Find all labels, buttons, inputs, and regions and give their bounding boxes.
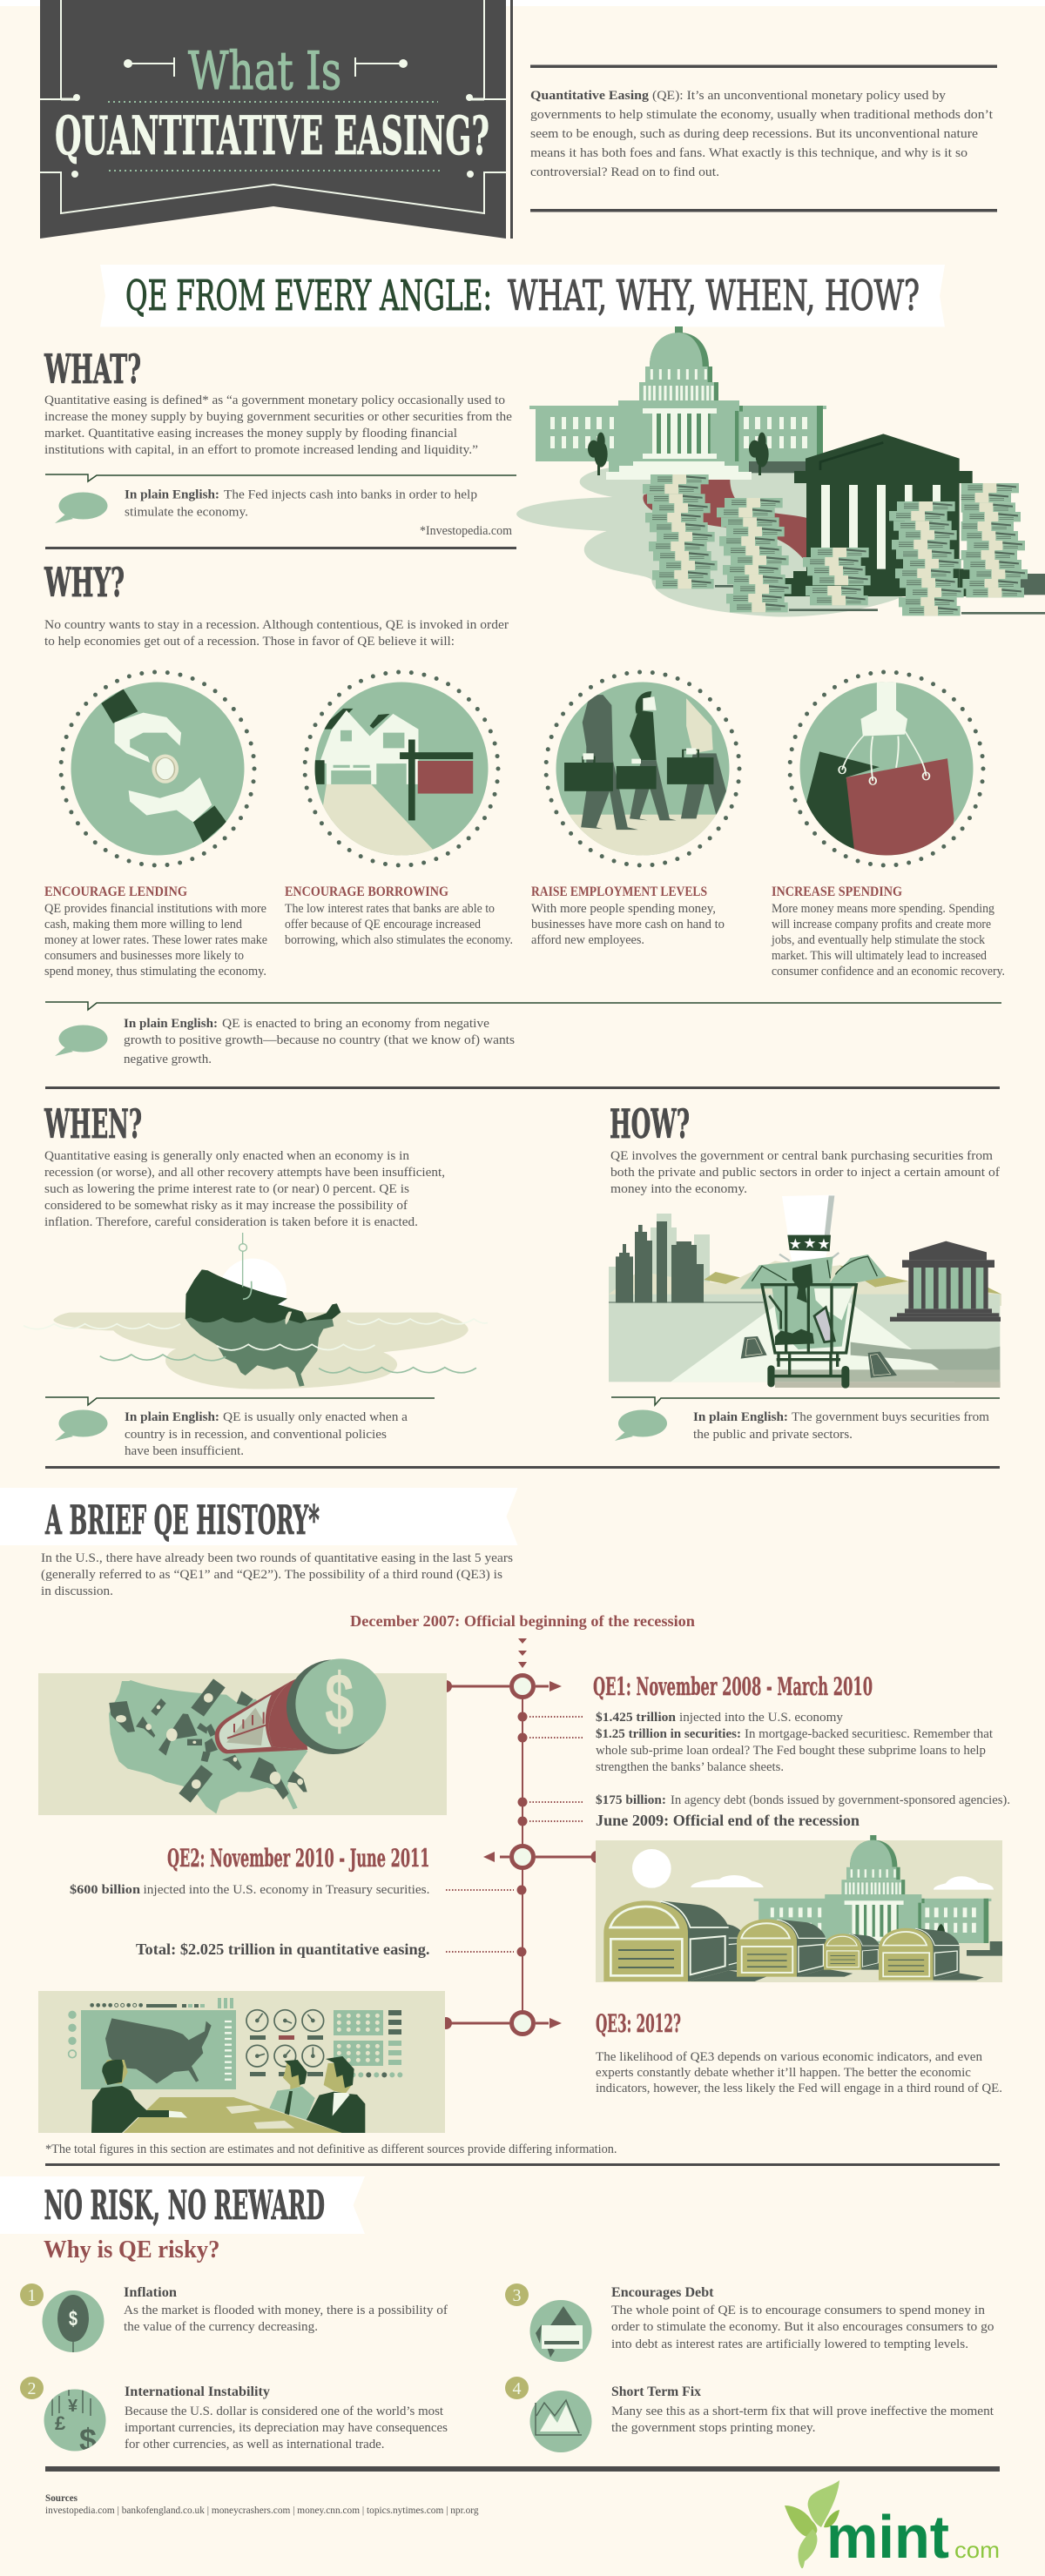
- callout: plain English why: growth to positive growth—because no country (that we know of) wants: [124, 1033, 515, 1047]
- QE1 text block: injected into the U.S. economy: [679, 1711, 844, 1725]
- cart: [762, 1285, 856, 1376]
- section: What: [44, 346, 516, 549]
- section: When: recession (or worse), and all other recovery attempts have been insufficient,: [44, 1166, 445, 1180]
- QE3 text block: The likelihood of QE3 depends on various economic indicators, and even: [596, 2050, 982, 2064]
- risk 4: short term fix: [505, 2377, 994, 2452]
- risk 3: encourages debt: The whole point of QE is to encourage consumers to spend money in: [611, 2304, 986, 2317]
- icon: house for sale: [305, 672, 498, 867]
- column: increase spending: consumer confidence and an economic recovery.: [772, 965, 1005, 979]
- risk 1: inflation: $: [69, 2307, 78, 2331]
- column: increase spending: will increase company profits and create more: [772, 918, 991, 932]
- column: raise employment: afford new employees.: [531, 933, 644, 947]
- illustration: capitol, bank and money stacks: [516, 326, 1045, 616]
- logo: mint.com: com: [954, 2537, 1000, 2563]
- QE3 text block: experts constantly debate whether it’ll happen. The better the economic: [596, 2066, 971, 2080]
- illustration: megaphone over US map: $: [325, 1658, 354, 1745]
- section: What: *Investopedia.com: [420, 524, 512, 538]
- column: increase spending: INCREASE SPENDING: [772, 884, 902, 899]
- hat: [782, 1195, 834, 1236]
- falling securities: [741, 1336, 897, 1378]
- column: encourage lending: QE provides financial institutions with more: [44, 902, 266, 916]
- callout: plain English why: negative growth.: [124, 1053, 212, 1066]
- risk 2: international instability: Because the U.S. dollar is considered one of the world’s most: [125, 2404, 444, 2418]
- risk 1: inflation: As the market is flooded with money, there is a possibility of: [124, 2304, 448, 2317]
- callout: plain English when: have been insufficient.: [125, 1444, 244, 1458]
- section: How: HOW?: [610, 1100, 690, 1147]
- section: No risk, no reward: [0, 2176, 994, 2458]
- QE1 text block: In agency debt (bonds issued by government-sponsored agencies).: [671, 1793, 1010, 1807]
- column: encourage borrowing: [285, 884, 513, 947]
- callout: plain English why: In plain English:: [124, 1017, 218, 1031]
- intro text block: (QE): It’s an unconventional monetary policy used by: [652, 89, 947, 103]
- callout: plain English how: In plain English:: [693, 1410, 788, 1424]
- section: What: Quantitative easing is defined* as “a government monetary policy occasionally used to: [44, 393, 505, 407]
- banner heading: QE from every angle: [100, 265, 945, 327]
- illustration: Uncle Sam with shopping cart: ★: [818, 1236, 830, 1253]
- column: increase spending: [771, 884, 1005, 979]
- subheading: Why is QE risky?: [44, 2236, 219, 2263]
- timeline start: [350, 1612, 695, 1668]
- risk 1: inflation: Inflation: [124, 2285, 177, 2300]
- risk 2: international instability: International Instability: [125, 2384, 270, 2399]
- QE1 text block: $1.25 trillion in securities:: [596, 1727, 741, 1741]
- column: encourage lending: cash, making them more willing to lend: [44, 918, 242, 932]
- heading banner: [0, 2176, 365, 2234]
- logo: mint.com: mint: [826, 2503, 949, 2571]
- illustration: Uncle Sam with shopping cart: ★: [789, 1236, 802, 1253]
- risk 4: short term fix: Many see this as a short-term fix that will prove ineffective the moment: [611, 2404, 994, 2418]
- history intro: [41, 1551, 513, 1598]
- callout: plain English: [45, 474, 516, 523]
- section: What: increase the money supply by buying government securities or other securities from the: [44, 410, 512, 424]
- heading banner: NO RISK, NO REWARD: [44, 2182, 325, 2229]
- QE3 text block: [596, 2009, 1002, 2095]
- column: encourage lending: ENCOURAGE LENDING: [44, 884, 187, 899]
- capitol building: [529, 326, 826, 480]
- callout: plain English when: QE is usually only enacted when a: [223, 1410, 408, 1424]
- section: How: money into the economy.: [610, 1182, 747, 1196]
- timeline start: December 2007: Official beginning of the recession: [350, 1612, 695, 1630]
- section: When: Quantitative easing is generally only enacted when an economy is in: [44, 1149, 410, 1163]
- callout: plain English: In plain English:: [125, 488, 219, 501]
- section: How: QE involves the government or central bank purchasing securities from: [610, 1149, 993, 1163]
- risk 3: encourages debt: 3: [512, 2286, 521, 2305]
- risk 3: encourages debt: order to stimulate the economy. But it also encourages consumers to go: [611, 2320, 994, 2334]
- callout: plain English when: country is in recession, and conventional policies: [125, 1428, 387, 1442]
- risk 4: short term fix: 4: [512, 2379, 521, 2398]
- logo: mint.com: [785, 2480, 1000, 2571]
- sources: investopedia.com | bankofengland.co.uk | moneycrashers.com | money.cnn.com | topics.nytimes.com | npr.org: [45, 2504, 479, 2516]
- history intro: In the U.S., there have already been two rounds of quantitative easing in the last 5 years: [41, 1551, 513, 1565]
- risk 1: inflation: 1: [28, 2286, 37, 2305]
- risk 2: international instability: £: [55, 2412, 66, 2434]
- callout: plain English: The Fed injects cash into banks in order to help: [224, 488, 477, 501]
- risk 2: international instability: ¥: [68, 2397, 78, 2416]
- banner heading: QE from every angle: QE FROM EVERY ANGLE:: [125, 272, 492, 320]
- section: Why: WHY?: [44, 559, 125, 606]
- timeline axis and nodes: [440, 1675, 603, 2034]
- intro text block: controversial? Read on to find out.: [530, 165, 719, 179]
- illustration: hooked US map in water: [24, 1233, 488, 1389]
- column: increase spending: More money means more spending. Spending: [772, 902, 994, 916]
- risk 2: international instability: for other currencies, as well as international trade.: [125, 2438, 385, 2452]
- section: When: inflation. Therefore, careful consideration is taken before it is enacted.: [44, 1215, 418, 1229]
- column: increase spending: jobs, and eventually help stimulate the stock: [771, 933, 985, 947]
- QE1 text block: [593, 1672, 1010, 1829]
- title: Quantitative Easing: QUANTITATIVE EASING?: [55, 105, 489, 167]
- illustration: capitol and treasury chests: [596, 1835, 1002, 1982]
- column: encourage lending: spend money, thus stimulating the economy.: [44, 965, 266, 979]
- callout: plain English when: [45, 1397, 435, 1458]
- intro text block: means it has both foes and fans. What exactly is this technique, and why is it so: [530, 146, 967, 160]
- icon: shopping bags: [786, 672, 983, 867]
- column: encourage borrowing: offer because of QE encourage increased: [285, 918, 481, 932]
- section: How: [609, 1100, 1001, 1442]
- QE3 text block: QE3: 2012?: [596, 2009, 681, 2038]
- risk 2: international instability: $: [79, 2422, 97, 2458]
- section: What: institutions with capital, in an effort to promote increased lending and liquidity.”: [44, 443, 478, 457]
- column: increase spending: market. This will ultimately lead to increased: [772, 949, 987, 963]
- risk 1: inflation: the value of the currency decreasing.: [124, 2320, 318, 2334]
- sources: Sources: [45, 2492, 78, 2504]
- QE2 text block: injected into the U.S. economy in Treasury securities.: [143, 1883, 429, 1897]
- column: encourage borrowing: The low interest rates that banks are able to: [285, 902, 495, 916]
- column: encourage borrowing: borrowing, which also stimulates the economy.: [285, 933, 513, 947]
- QE1 text block: $175 billion:: [596, 1793, 666, 1807]
- risk 3: encourages debt: Encourages Debt: [611, 2285, 714, 2300]
- history intro: (generally referred to as “QE1” and “QE2”). The possibility of a third round (QE3) is: [41, 1568, 502, 1582]
- icon: lending hands: [61, 672, 254, 865]
- risk 3: encourages debt: [505, 2283, 994, 2362]
- risk 2: international instability: 2: [28, 2379, 37, 2398]
- section: Why: to help economies get out of a recession. Those in favor of QE believe it will:: [44, 635, 455, 649]
- section: When: considered to be somewhat risky as it may increase the possibility of: [44, 1199, 408, 1213]
- callout: plain English why: QE is enacted to bring an economy from negative: [222, 1017, 489, 1031]
- section: How: both the private and public sectors in order to inject a certain amount of: [610, 1166, 1000, 1180]
- history intro: in discussion.: [41, 1584, 113, 1598]
- risk 3: encourages debt: into debt as interest rates are artificially lowered to tempting levels.: [611, 2337, 968, 2351]
- section: Brief QE history: [0, 1488, 1010, 2156]
- figure in cart: [740, 1254, 887, 1349]
- illustration: control room meeting: [38, 1991, 445, 2133]
- icon: workers with briefcases: [546, 672, 739, 865]
- QE1 text block: In mortgage-backed securitiesc. Remember that: [745, 1727, 994, 1741]
- column: encourage lending: consumers and businesses more likely to: [44, 949, 244, 963]
- illustration: Uncle Sam with shopping cart: ★: [804, 1234, 816, 1251]
- risk 4: short term fix: the government stops printing money.: [611, 2421, 815, 2435]
- trees: [588, 433, 769, 475]
- column: raise employment: With more people spending money,: [531, 902, 716, 916]
- intro text block: Quantitative Easing: [530, 89, 650, 103]
- gauges: [246, 2010, 324, 2067]
- section: What: market. Quantitative easing increases the money supply by flooding financial: [44, 427, 457, 441]
- title banner: [40, 0, 513, 239]
- column: encourage borrowing: ENCOURAGE BORROWING: [285, 884, 448, 899]
- footnote: *The total figures in this section are estimates and not definitive as different sources provide differing information.: [45, 2142, 617, 2156]
- intro text block: governments to help stimulate the economy, usually when traditional methods don’t: [530, 108, 994, 122]
- illustration: megaphone over US map: [38, 1658, 447, 1815]
- callout: plain English: stimulate the economy.: [125, 505, 248, 519]
- callout: plain English how: the public and private sectors.: [693, 1428, 853, 1442]
- section: Why: No country wants to stay in a recession. Although contentious, QE is invoked in order: [44, 618, 509, 632]
- QE1 text block: whole sub-prime loan ordeal? The Fed bought these subprime loans to help: [596, 1744, 986, 1758]
- intro text block: [530, 64, 997, 212]
- callout: plain English why: [45, 1002, 1001, 1066]
- QE1 text block: strengthen the banks’ balance sheets.: [596, 1760, 784, 1774]
- QE3 text block: indicators, however, the less likely the Fed will engage in a third round of QE.: [596, 2082, 1002, 2095]
- column: raise employment: RAISE EMPLOYMENT LEVELS: [531, 884, 707, 899]
- callout: plain English when: In plain English:: [125, 1410, 219, 1424]
- illustration: Uncle Sam with shopping cart: [609, 1195, 1001, 1389]
- central bank: [784, 434, 1045, 596]
- table and people: [124, 2097, 342, 2133]
- column: raise employment: businesses have more cash on hand to: [531, 918, 725, 932]
- callout: plain English how: The government buys securities from: [792, 1410, 989, 1424]
- callout: plain English how: [611, 1397, 1000, 1442]
- money stacks: [643, 474, 1028, 615]
- column: encourage lending: [44, 884, 267, 979]
- heading banner: [0, 1488, 517, 1545]
- column: raise employment: [531, 884, 725, 947]
- risk 2: international instability: [20, 2377, 448, 2458]
- section: What: WHAT?: [44, 346, 141, 393]
- QE1 text block: June 2009: Official end of the recession: [596, 1812, 860, 1829]
- risk 2: international instability: important currencies, its depreciation may have consequences: [125, 2421, 448, 2435]
- chests: [603, 1900, 984, 1981]
- title: What Is: What Is: [188, 41, 341, 102]
- risk 1: inflation: [20, 2283, 448, 2352]
- section: When: WHEN?: [44, 1100, 142, 1147]
- heading banner: A BRIEF QE HISTORY*: [44, 1497, 320, 1544]
- risk 4: short term fix: Short Term Fix: [611, 2384, 701, 2399]
- bank: [890, 1241, 1001, 1322]
- section: When: such as lowering the prime interest rate to (or near) 0 percent. QE is: [44, 1182, 409, 1196]
- QE2 text block: [70, 1844, 430, 1958]
- section: When: [24, 1100, 488, 1458]
- intro text block: seem to be enough, such as during deep recessions. But its unconventional nature: [530, 127, 978, 141]
- QE2 text block: Total: $2.025 trillion in quantitative easing.: [136, 1940, 430, 1958]
- column: encourage lending: money at lower rates. These lower rates make: [44, 933, 267, 947]
- QE2 text block: QE2: November 2010 - June 2011: [167, 1844, 430, 1873]
- sources: [45, 2492, 479, 2516]
- QE2 text block: $600 billion: [70, 1883, 141, 1897]
- QE1 text block: $1.425 trillion: [596, 1711, 677, 1725]
- section: Why: [44, 559, 1005, 1089]
